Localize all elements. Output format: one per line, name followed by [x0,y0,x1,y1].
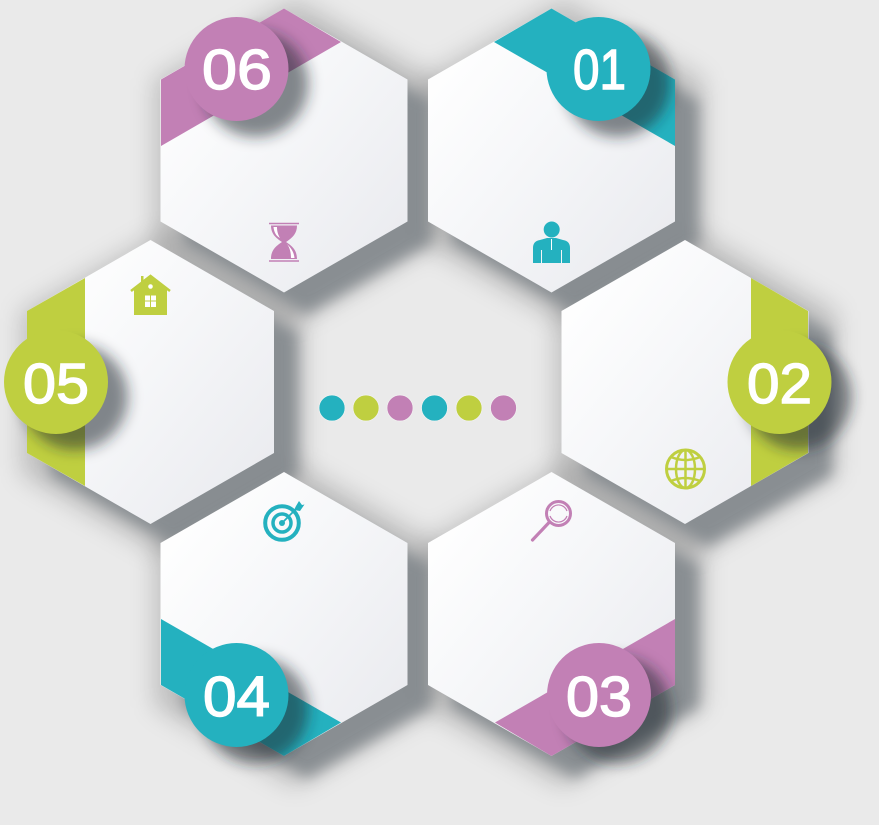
center dots [319,395,516,421]
icon: house [131,276,170,315]
icon: magnifying glass [532,502,570,540]
icon: target [265,501,304,540]
panel: 06 [160,8,408,292]
icon: hourglass [269,224,299,261]
panel: 03 [428,472,675,763]
number 03: 03 [566,665,632,729]
number 04: 04 [203,665,270,729]
panel: 01 [428,8,675,292]
number 01: 01 [573,38,626,102]
number 05: 05 [23,352,89,416]
icon: businessman [533,222,570,263]
number 06: 06 [202,38,272,102]
panel: 04 [160,472,408,763]
icon: globe [666,450,704,488]
panel: 05 [4,240,274,524]
number 02: 02 [747,352,812,416]
panel: 02 [562,240,852,524]
